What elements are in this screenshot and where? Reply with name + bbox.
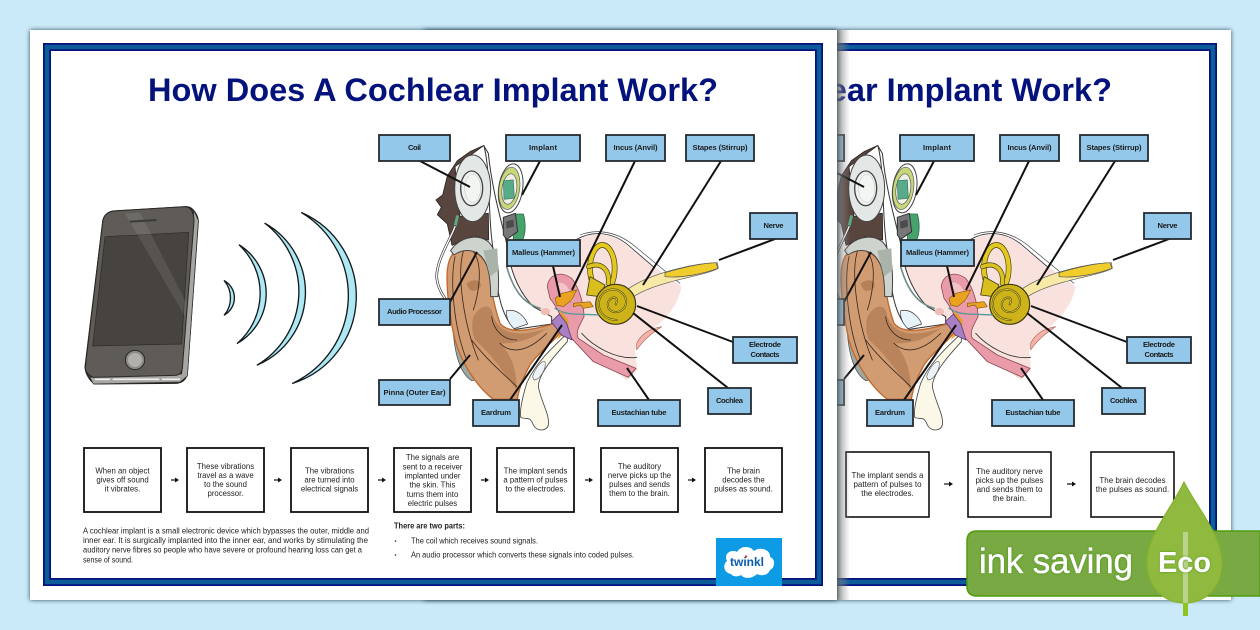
flow step 3 <box>291 448 368 512</box>
flow step 5: The implant sends <box>504 466 567 476</box>
flow step 4: turns them into <box>407 490 459 499</box>
background page ear diagram: Cochlea <box>1110 396 1138 405</box>
flow step 6: them to the brain. <box>609 489 670 498</box>
flow step 3: The vibrations <box>305 466 354 476</box>
description paragraph: auditory nerve fibres so people who have severe or profound hearing loss can get a <box>83 546 363 554</box>
background page flow boxes: the pulses as sound. <box>1096 485 1169 494</box>
title: How Does A Cochlear Implant Work? <box>148 72 718 108</box>
flow step 6: nerve picks up the <box>608 471 671 480</box>
flow step 4: the skin. This <box>410 481 455 490</box>
flow step 3: electrical signals <box>301 484 358 494</box>
anatomy label text: Audio Processor <box>387 307 442 316</box>
front poster sheet <box>30 30 837 600</box>
sound waves <box>224 213 356 383</box>
shadow cast by front page <box>837 30 850 600</box>
background page ear diagram <box>773 135 1191 430</box>
anatomy label text: Cochlea <box>716 396 744 405</box>
anatomy label text: Incus (Anvil) <box>614 143 658 152</box>
arrow <box>585 478 593 482</box>
arrow <box>378 478 386 482</box>
two parts list: An audio processor which converts these signals into coded pulses. <box>411 550 634 560</box>
anatomy label text <box>384 143 784 417</box>
anatomy label text: Pinna (Outer Ear) <box>384 388 446 397</box>
background page: second poster sheet <box>424 30 1231 600</box>
ink saving eco badge: Eco <box>1158 547 1211 579</box>
description paragraph: A cochlear implant is a small electronic device which bypasses the outer, middle and <box>83 526 369 536</box>
background page flow boxes: the electrodes. <box>861 489 914 498</box>
background page ear diagram: Electrode <box>1143 340 1175 349</box>
anatomy label text: Eustachian tube <box>612 408 666 417</box>
anatomy label text: Implant <box>529 143 557 152</box>
background page flow boxes: The auditory nerve <box>976 467 1043 476</box>
flow step 7: The brain <box>727 466 760 476</box>
background page ear diagram: Implant <box>923 143 951 152</box>
flow step 5: to the electrodes. <box>506 484 565 494</box>
background page flow boxes: The implant sends a <box>851 471 924 480</box>
flow step 3: are turned into <box>304 476 355 484</box>
flow step 6: The auditory <box>618 462 661 471</box>
flow step 2: These vibrations <box>197 462 254 471</box>
ear anatomy diagram <box>436 145 718 430</box>
twinkl logo <box>716 538 782 586</box>
anatomy label text: Contacts <box>750 350 780 359</box>
flow step 5 <box>497 448 574 512</box>
background page ear diagram: Stapes (Stirrup) <box>1086 143 1142 152</box>
background page flow boxes: picks up the pulses <box>975 476 1044 485</box>
flow step 4: sent to a receiver <box>403 462 463 471</box>
background page ear diagram: Malleus (Hammer) <box>906 248 969 257</box>
ink saving eco badge <box>967 482 1260 616</box>
description paragraph: sense of sound. <box>83 556 133 564</box>
flow step 2: to the sound <box>204 480 247 489</box>
phone illustration <box>85 207 198 384</box>
background page ear diagram: Nerve <box>1158 221 1178 230</box>
label leader lines <box>420 161 775 400</box>
flow step 4: implanted under <box>405 472 461 480</box>
description paragraph: inner ear. It is surgically implanted into the inner ear, and works by stimulating the <box>83 536 368 545</box>
anatomy label text: Electrode <box>749 340 781 349</box>
twinkl logo: twinkl <box>730 555 764 569</box>
anatomy label text: Stapes (Stirrup) <box>692 143 748 152</box>
anatomy label text: Malleus (Hammer) <box>512 248 575 257</box>
flow step 4: The signals are <box>406 453 459 462</box>
flow step 1: it vibrates. <box>105 484 140 494</box>
arrow <box>688 478 696 482</box>
anatomy label text: Coil <box>408 143 421 152</box>
background page flow boxes: and sends them to <box>977 485 1043 494</box>
flow step 6: pulses and sends <box>609 480 670 489</box>
icon: leaf <box>1147 482 1222 616</box>
background page flow boxes: pattern of pulses to <box>853 480 922 489</box>
description paragraph <box>83 526 369 564</box>
flow step 1: gives off sound <box>96 476 149 484</box>
ink saving eco badge: ink saving <box>979 542 1133 581</box>
anatomy label boxes <box>379 135 797 426</box>
flow step 2: travel as a wave <box>197 471 254 480</box>
arrow <box>481 478 489 482</box>
anatomy label text: Eardrum <box>481 408 511 417</box>
flow step 7: decodes the <box>722 476 765 484</box>
flow step 4 <box>394 448 471 512</box>
two parts list <box>394 522 634 560</box>
flow step 4: electric pulses <box>408 499 457 508</box>
background page title: How Does A Cochlear Implant Work? <box>542 72 1112 108</box>
background page flow boxes: the brain. <box>993 494 1026 503</box>
flow step 1: When an object <box>95 466 150 476</box>
two parts list: The coil which receives sound signals. <box>411 536 538 546</box>
flow step 7 <box>705 448 782 512</box>
background page ear diagram: Contacts <box>1144 350 1174 359</box>
background page flow boxes <box>846 452 1174 517</box>
background page ear diagram: Eardrum <box>875 408 905 417</box>
arrow <box>274 478 282 482</box>
two parts list: There are two parts: <box>394 522 465 530</box>
background page ear diagram: Incus (Anvil) <box>1008 143 1052 152</box>
flow step 5: a pattern of pulses <box>503 476 568 484</box>
anatomy label text: Nerve <box>764 221 784 230</box>
flow step 2 <box>187 448 264 512</box>
arrow <box>171 478 179 482</box>
flow step 1 <box>84 448 161 512</box>
background page ear diagram: Eustachian tube <box>1006 408 1060 417</box>
background page flow boxes: The brain decodes <box>1099 476 1166 485</box>
flow step 7: pulses as sound. <box>714 484 773 494</box>
flow step 2: processor. <box>208 489 243 498</box>
flow step 6 <box>601 448 678 512</box>
